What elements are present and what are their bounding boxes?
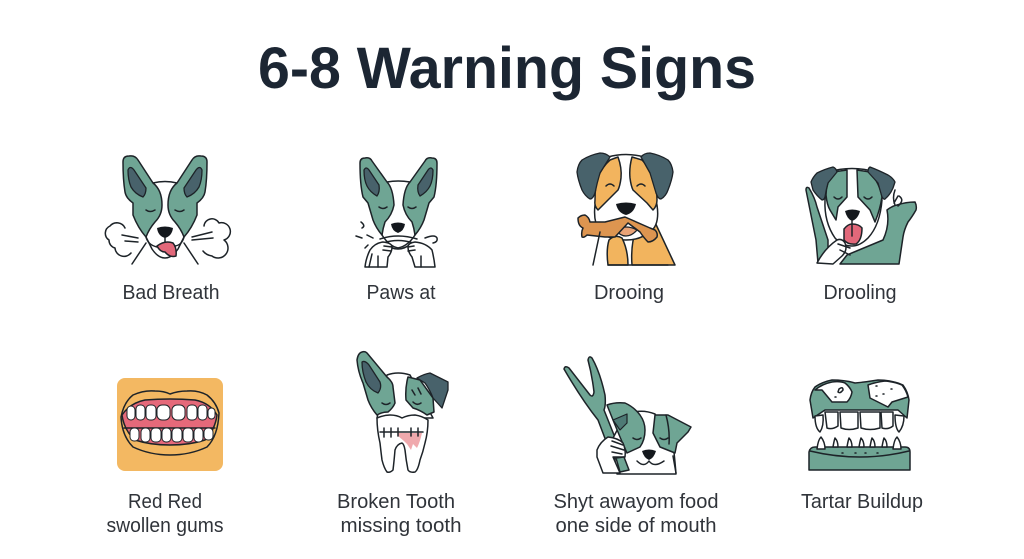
label: red swollen gums: Red Red (128, 491, 202, 513)
label: drooling (first): Drooing (594, 282, 664, 304)
label: red swollen gums (106, 491, 224, 537)
icon: red swollen gums (117, 378, 223, 471)
label: shy away from food: Shyt awayom food (554, 491, 718, 513)
title: 6-8 Warning Signs (258, 36, 756, 101)
icon: dog pawing at mouth (356, 158, 437, 267)
label: drooling (second): Drooling (824, 282, 896, 304)
label: shy away from food: one side of mouth (556, 515, 716, 537)
label: broken tooth (337, 491, 462, 537)
icon: dog with bone (577, 153, 675, 265)
label: tartar buildup: Tartar Buildup (801, 491, 923, 513)
icon: tartar buildup teeth (809, 380, 910, 470)
icon: broken tooth dog (357, 352, 448, 472)
label: broken tooth: Broken Tooth (337, 491, 455, 513)
label: bad breath: Bad Breath (122, 282, 220, 304)
icon: dog with bad breath (105, 156, 230, 264)
label: red swollen gums: swollen gums (106, 515, 224, 537)
icon: dog shying away with fork (564, 357, 691, 474)
label: broken tooth: missing tooth (340, 515, 462, 537)
label: paws at: Paws at (366, 282, 436, 304)
label: shy away from food (554, 491, 718, 537)
icon: dog drooling with raised paws (806, 167, 916, 264)
